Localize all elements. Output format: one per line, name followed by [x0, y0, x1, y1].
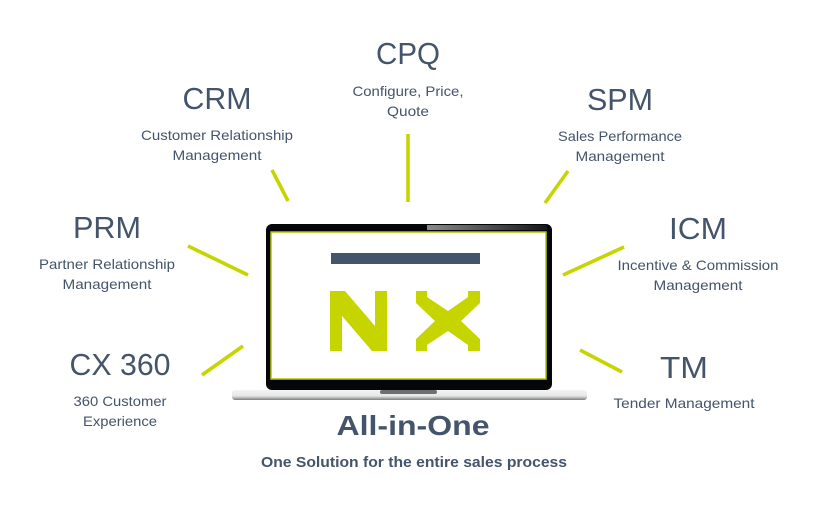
- label: CX 360: [70, 347, 170, 429]
- label: CRM: Customer Relationship: [141, 127, 293, 143]
- label: PRM: PRM: [73, 210, 141, 245]
- label: SPM: Sales Performance: [558, 128, 682, 144]
- label: CRM: [141, 81, 293, 163]
- ray: CPQ: [406, 134, 410, 202]
- logo letter N: [330, 291, 387, 351]
- label: TM: [614, 350, 755, 411]
- label: CPQ: Quote: [387, 103, 429, 119]
- subheading: One Solution for the entire sales process: [261, 454, 567, 471]
- ray: CRM: [272, 170, 288, 201]
- label: CPQ: Configure, Price,: [352, 83, 464, 99]
- label: ICM: Incentive & Commission: [618, 257, 778, 273]
- label: PRM: Management: [62, 276, 152, 292]
- label: CRM: Management: [172, 147, 262, 163]
- ray: ICM: [563, 247, 624, 275]
- label: ICM: ICM: [669, 211, 727, 246]
- label: ICM: Management: [654, 277, 743, 293]
- label: CPQ: [352, 36, 464, 119]
- label: SPM: SPM: [587, 82, 653, 117]
- laptop hinge notch: [380, 390, 437, 394]
- ray: PRM: [188, 246, 248, 275]
- ray: TM: [580, 350, 622, 372]
- laptop base: [232, 390, 587, 400]
- label: PRM: [39, 210, 175, 292]
- logo letter X: [416, 291, 480, 351]
- label: CX 360: CX 360: [70, 347, 170, 382]
- label: PRM: Partner Relationship: [39, 256, 175, 272]
- ray: CX 360: [202, 346, 243, 375]
- label: ICM: [618, 211, 778, 293]
- label: SPM: Management: [576, 148, 665, 164]
- label: CX 360: 360 Customer: [74, 393, 167, 409]
- label: CRM: CRM: [182, 81, 252, 116]
- label: SPM: [558, 82, 682, 164]
- laptop illustration: [232, 224, 587, 400]
- label: TM: Tender Management: [614, 395, 755, 411]
- label: TM: TM: [660, 350, 708, 385]
- label: CX 360: Experience: [83, 413, 157, 429]
- ray: SPM: [545, 171, 568, 203]
- heading: All-in-One: [336, 410, 490, 441]
- bezel highlight: [427, 225, 547, 230]
- screen: [271, 232, 546, 379]
- logo top bar: [331, 253, 480, 264]
- laptop body: [266, 224, 552, 390]
- label: CPQ: CPQ: [376, 36, 440, 71]
